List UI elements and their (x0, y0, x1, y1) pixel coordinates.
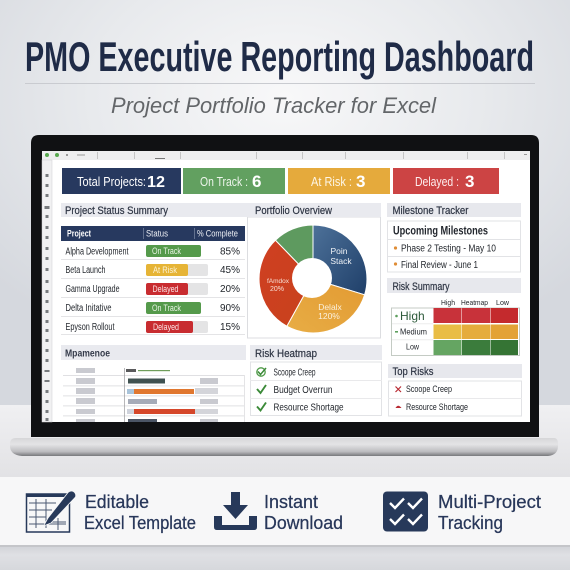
panel: milestone tracker (387, 203, 521, 272)
row: beta (66, 264, 240, 276)
donut labels: fAmdox (267, 278, 290, 285)
label: editable excel template: Excel Template (84, 513, 196, 533)
donut labels: 20% (270, 286, 284, 293)
icon: spreadsheet and pencil (26, 491, 76, 532)
panel: gantt milestones (61, 345, 246, 422)
spreadsheet left column (42, 160, 52, 422)
KPI: total projects (62, 168, 181, 194)
row: alpha (66, 245, 240, 258)
icon: download (214, 492, 257, 530)
panel: project status summary (61, 203, 247, 335)
row: epyson: Epyson Rollout (66, 322, 115, 333)
row: epyson (66, 321, 240, 333)
milestone 1: Phase 2 Testing - May 10 (401, 244, 496, 254)
heatmap (392, 308, 520, 356)
row: beta: At Risk (153, 265, 177, 275)
risk 1: Scoope Creep (406, 384, 452, 394)
icon: checklist square (383, 492, 428, 532)
label: multi-project tracking: Tracking (438, 513, 503, 533)
label: editable excel template (84, 492, 196, 533)
row: gamma: 20% (220, 284, 240, 295)
donut labels: Delalx (318, 302, 343, 312)
row label: medium: Medium (400, 326, 427, 336)
heading: Risk Summary (392, 281, 450, 293)
risk 2: Resource Shortage (406, 402, 468, 412)
KPI: on track (183, 168, 285, 194)
column labels (441, 298, 510, 307)
table row lines (61, 259, 245, 335)
label: multi-project tracking (438, 492, 541, 533)
donut labels: 120% (318, 311, 340, 321)
row: delta: On Track (152, 303, 181, 313)
KPI: on track: 6 (252, 172, 261, 191)
table header: Status (146, 228, 168, 238)
label: instant download: Instant (264, 492, 318, 512)
KPI: delayed: Delayed : (415, 174, 459, 189)
KPI: at risk: 3 (356, 172, 365, 191)
upcoming milestones: Upcoming Milestones (393, 224, 488, 238)
KPI: total projects: 12 (147, 174, 165, 191)
label: editable excel template: Editable (85, 492, 149, 512)
donut labels: Poin (330, 246, 348, 256)
gantt legend (126, 369, 170, 372)
table header: Project (67, 228, 91, 238)
heading (61, 203, 247, 217)
heading: Top Risks (392, 366, 434, 378)
row label: high: High (400, 309, 425, 323)
item: resource shortage: Resource Shortage (274, 402, 344, 414)
label: instant download: Download (264, 513, 343, 533)
panel: risk summary (387, 278, 521, 356)
panel: portfolio overview (247, 203, 381, 338)
laptop bezel (31, 135, 539, 437)
panel: top risks (388, 364, 522, 416)
column labels: Low (496, 298, 510, 307)
laptop base (10, 438, 558, 456)
subtitle: Project Portfolio Tracker for Excel (111, 93, 437, 118)
gantt grid (63, 368, 245, 422)
column labels: High (441, 298, 455, 307)
milestone 2: Final Review - June 1 (401, 260, 478, 271)
row: gamma: Gamma Upgrade (66, 284, 120, 295)
row: gamma: Delayed (152, 284, 178, 294)
gantt label blocks (76, 368, 218, 422)
row: delta: Delta Initative (66, 303, 112, 314)
heading: Milestone Tracker (392, 205, 469, 217)
KPI: on track: On Track : (200, 174, 248, 189)
table header (61, 226, 245, 241)
row: delta (66, 302, 240, 314)
heading: Risk Heatmap (255, 348, 317, 360)
row: beta: Beta Launch (66, 265, 106, 276)
donut chart (259, 225, 367, 333)
KPI: delayed (393, 168, 499, 194)
panel: risk heatmap (250, 345, 382, 416)
label: instant download (264, 492, 343, 533)
KPI: delayed: 3 (465, 172, 474, 191)
table header: % Complete (197, 228, 238, 238)
item: scope creep: Scoope Creep (274, 368, 316, 378)
feature band (0, 477, 570, 547)
heading (61, 345, 246, 360)
row: delta: 90% (220, 303, 240, 314)
column labels: Heatmap (461, 298, 488, 307)
row: gamma (66, 283, 240, 295)
heading: Portfolio Overview (255, 205, 332, 217)
label: multi-project tracking: Multi-Project (438, 492, 541, 512)
KPI: at risk: At Risk : (311, 174, 352, 189)
row label: low: Low (406, 342, 419, 352)
item: budget overrun: Budget Overrun (274, 385, 332, 396)
row: alpha: On Track (152, 246, 181, 256)
row: alpha: Alpha Development (66, 246, 129, 258)
heading: Project Status Summary (65, 205, 168, 217)
donut labels: Stack (330, 256, 352, 266)
gantt bars (127, 378, 195, 422)
row: alpha: 85% (220, 246, 240, 258)
spreadsheet toolbar (42, 151, 530, 160)
row: epyson: 15% (220, 322, 240, 333)
row: beta: 45% (220, 265, 240, 276)
KPI: total projects: Total Projects: (77, 174, 146, 189)
donut labels (267, 246, 352, 321)
row: epyson: Delayed (153, 322, 179, 332)
laptop (10, 135, 558, 456)
heading: Mpamenoe (65, 348, 110, 360)
KPI: at risk (288, 168, 390, 194)
